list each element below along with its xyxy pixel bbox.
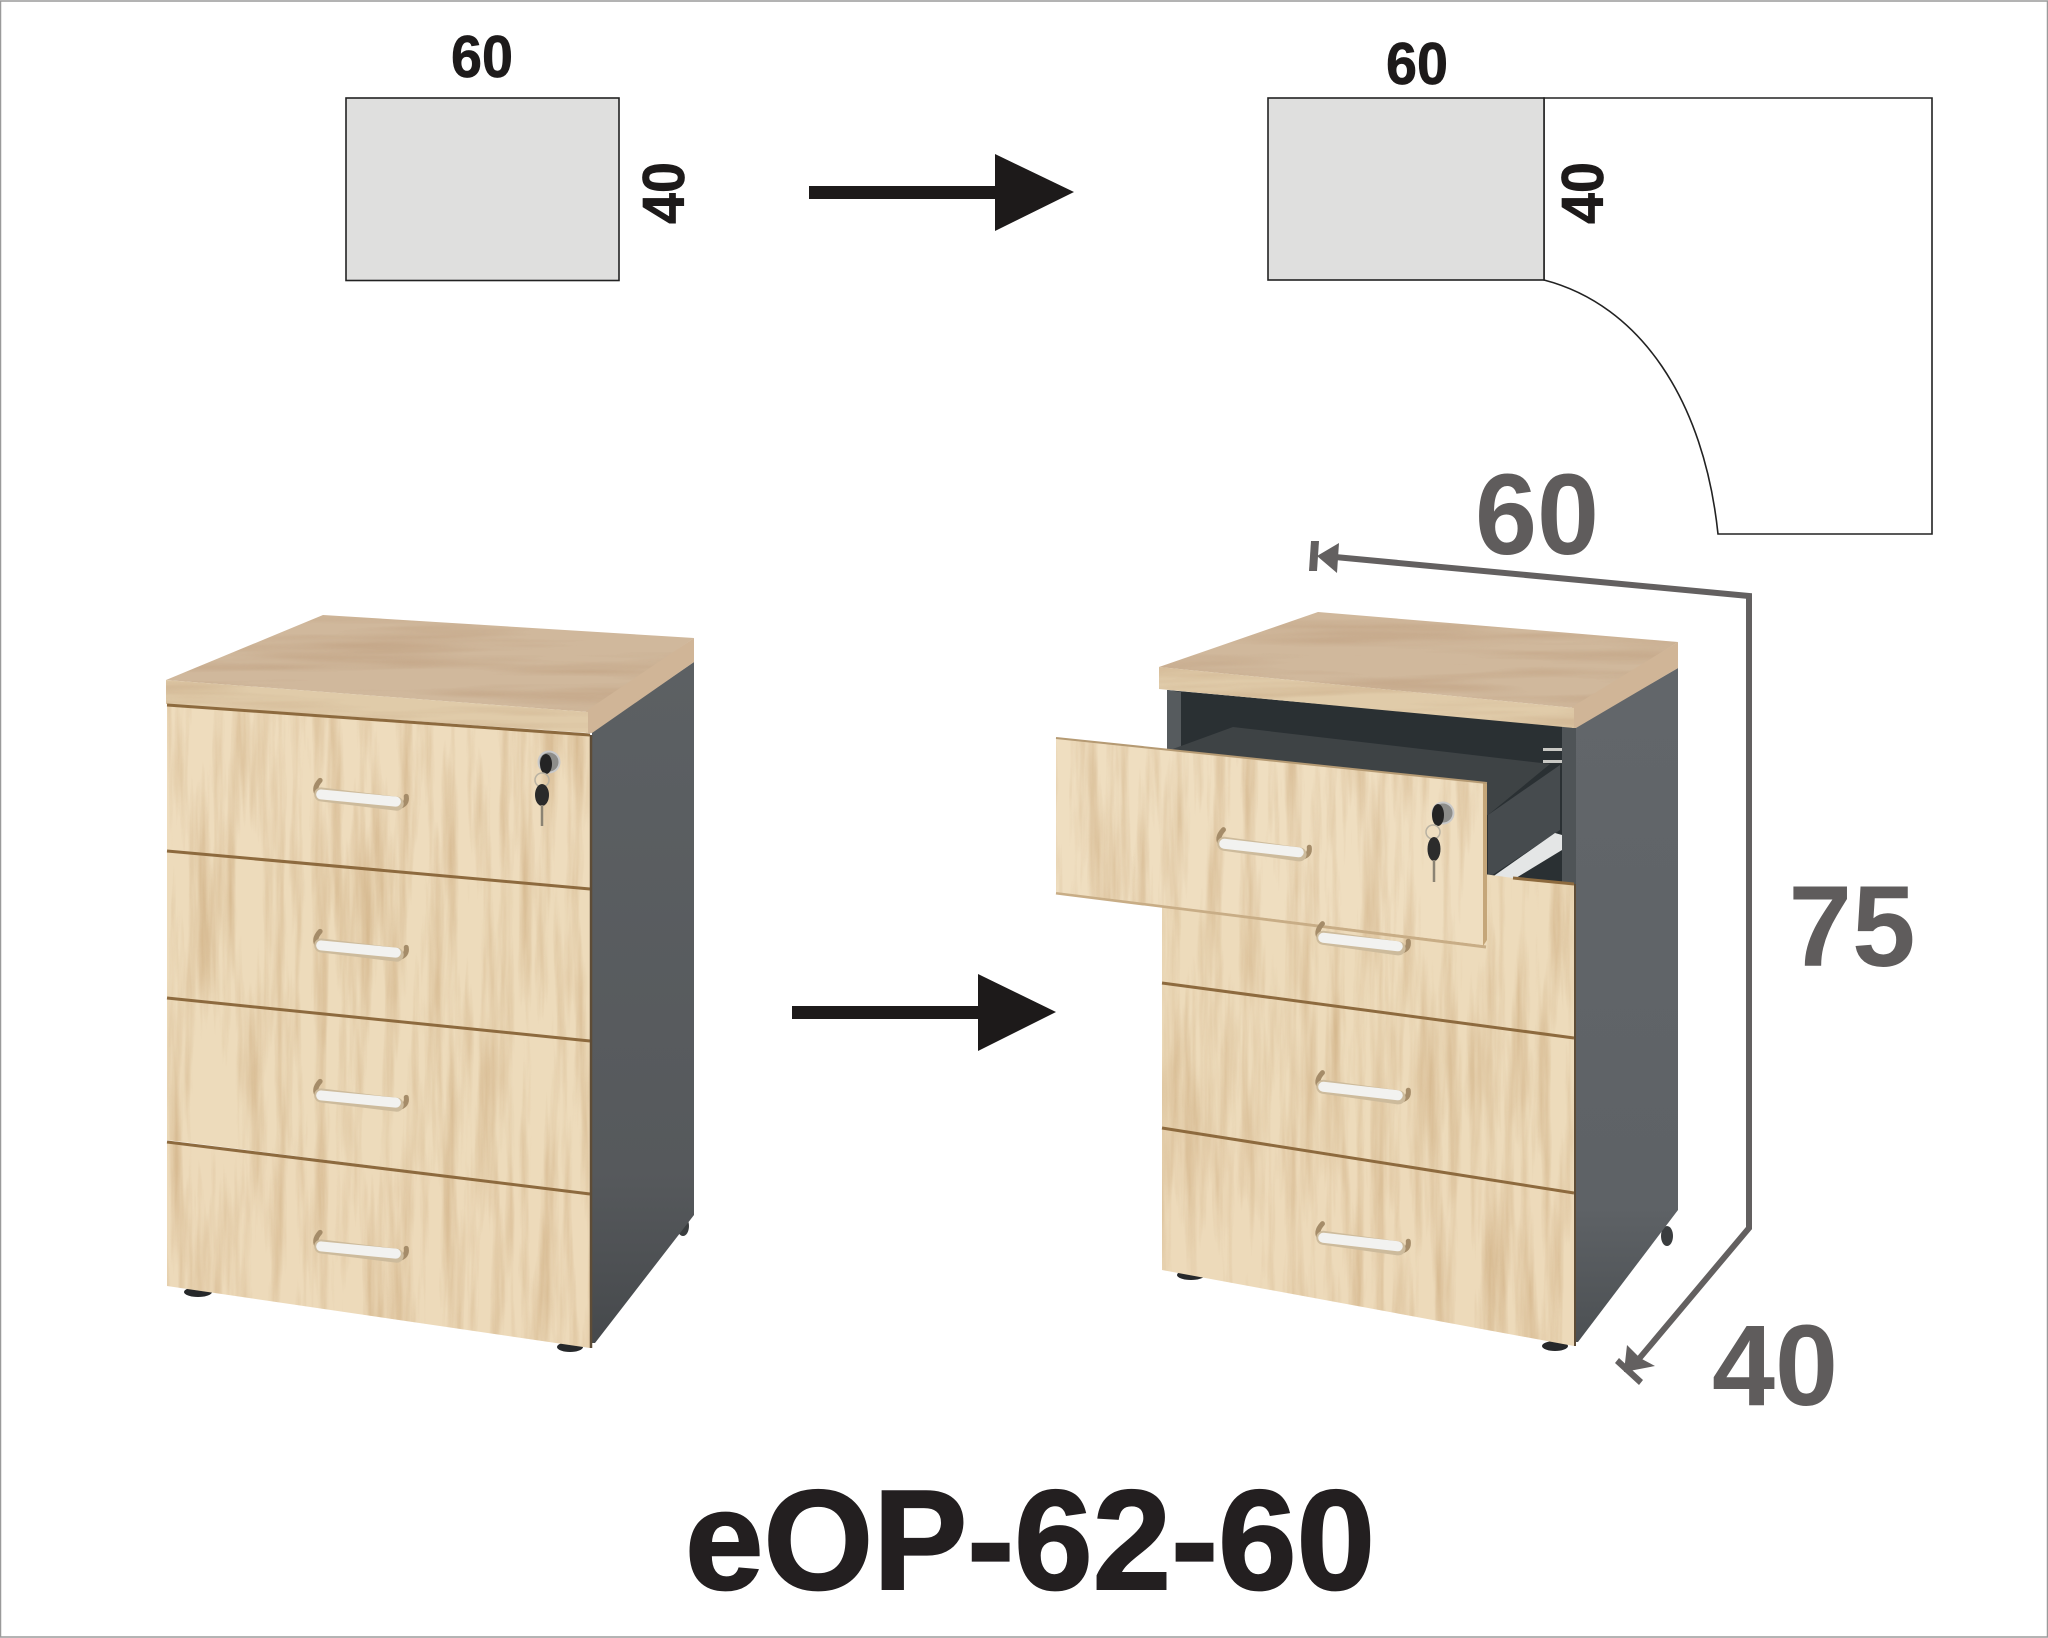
label: height 75: 75: [1788, 863, 1916, 991]
handle 1: [315, 780, 407, 807]
worktop side edge: [1572, 642, 1678, 728]
handle 3: [315, 1081, 407, 1108]
slide bracket: [1543, 748, 1562, 763]
open drawer top edge: [1056, 738, 1487, 783]
width label 60: 60: [1386, 31, 1448, 97]
worktop side edge: [586, 638, 694, 733]
panel: open-drawer cabinet: [1056, 612, 1678, 1351]
feet: [184, 1216, 689, 1352]
handle: open drawer: [1218, 829, 1310, 858]
open drawer shadow: [1056, 893, 1486, 947]
drawer 4: [167, 1143, 590, 1348]
handle 4: [315, 1232, 407, 1259]
plan rectangle 60x40: [346, 98, 619, 280]
left post: [1167, 690, 1181, 750]
drawer 3: [167, 999, 590, 1193]
right post: [1562, 725, 1576, 886]
arrow head: depth: [1624, 1345, 1655, 1372]
drawer back wall: [1170, 727, 1550, 815]
depth label 40: 40: [631, 162, 697, 224]
arrow: bottom: [792, 974, 1056, 1051]
drawer 3: [1162, 984, 1574, 1192]
width label 60: 60: [451, 24, 513, 90]
tick: depth: [1615, 1358, 1643, 1385]
drawer slide: [1488, 833, 1562, 895]
depth label 40: 40: [1550, 162, 1616, 224]
worktop surface: [166, 615, 694, 712]
panel: closed cabinet: [166, 615, 694, 1352]
plan rectangle 60x40: [1268, 98, 1544, 280]
handle 3: [1317, 1072, 1409, 1101]
handle 4: [1317, 1223, 1409, 1252]
open drawer front: [1056, 738, 1483, 945]
panel: small footprint plan: [346, 24, 697, 280]
drawer gaps: [167, 705, 591, 1348]
desk outline: [1544, 98, 1932, 534]
drawer side wall: [1488, 765, 1560, 878]
drawer gaps: [1162, 878, 1575, 1346]
title: model code: eOP-62-60: [685, 1461, 1375, 1620]
side panel: [1576, 668, 1678, 1342]
label: width 60: 60: [1475, 451, 1599, 579]
drawer 1: [167, 706, 590, 888]
worktop front edge: [1159, 667, 1574, 728]
lock and key: [1426, 802, 1454, 882]
cabinet interior: [1167, 690, 1576, 890]
feet: [1177, 1226, 1673, 1351]
drawer 2: [167, 852, 590, 1040]
arrow: top: [809, 154, 1074, 231]
handle 2: [315, 931, 407, 958]
tick: width: [1309, 541, 1319, 571]
open drawer edge: [1483, 782, 1487, 946]
arrow head: width: [1317, 543, 1339, 573]
handle 2: [1317, 923, 1409, 952]
dimension path: [1335, 557, 1749, 1360]
side panel: [592, 662, 694, 1343]
worktop surface: [1159, 612, 1678, 708]
lock and key: [535, 752, 560, 826]
worktop front edge: [166, 680, 588, 733]
drawer 2: [1162, 830, 1574, 1037]
label: depth 40: 40: [1712, 1302, 1838, 1430]
dimension lines: [1309, 541, 1749, 1385]
drawer 4: [1162, 1129, 1574, 1346]
panel: corner desk plan: [1268, 31, 1932, 534]
